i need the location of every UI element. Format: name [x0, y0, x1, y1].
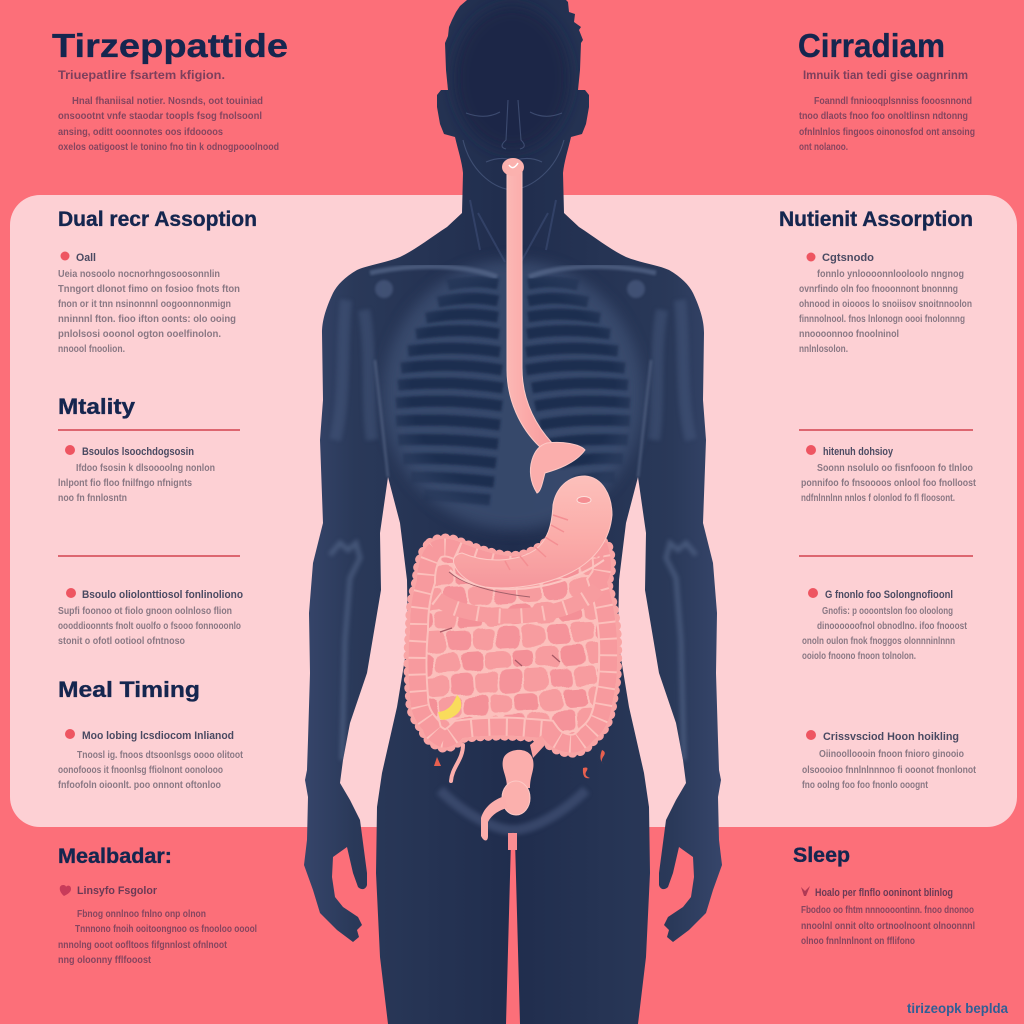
body text left: oxelos oatigoost le tonino fno tin k odnogpooolnood: [58, 142, 279, 153]
paragraph: oooddioonnts fnolt ouolfo o fsooo fonnooonlo: [58, 621, 241, 632]
paragraph: Soonn nsolulo oo fisnfooon fo tlnloo: [817, 463, 973, 474]
bullet label: Bsoulos lsoochdogsosin: [82, 446, 194, 458]
bullet label: Moo lobing lcsdiocom Inlianod: [82, 730, 234, 742]
paragraph: [58, 463, 215, 504]
paragraph: Tnngort dlonot fimo on fosioo fnots fton: [58, 284, 240, 295]
body text right: Foanndl fnniooqplsnniss fooosnnond: [814, 96, 972, 107]
paragraph: nninnnl fton. fioo ifton oonts: olo ooing: [58, 314, 236, 325]
paragraph: [58, 269, 240, 355]
paragraph: fnfoofoln oioonlt. poo onnont oftonloo: [58, 780, 221, 791]
body text right: [799, 96, 975, 153]
paragraph: noo fn fnnlosntn: [58, 493, 127, 504]
bullet: [806, 252, 816, 262]
paragraph: ooiolo fnoono fnoon tolnolon.: [802, 651, 916, 662]
paragraph: Ifdoo fsosin k dlsoooolng nonlon: [76, 463, 215, 474]
paragraph: [799, 269, 972, 355]
main title right: Cirradiam: [798, 27, 945, 64]
bullet label: Crissvsciod Hoon hoikling: [823, 731, 959, 743]
paragraph: nnoooonnoo fnoolninol: [799, 329, 899, 340]
body text left: onsoootnt vnfe staodar toopls fsog fnolsoonl: [58, 111, 262, 122]
subtitle left: Triuepatlire fsartem kfigion.: [58, 68, 225, 82]
bullet: [806, 445, 816, 455]
body text right: ofnlnlnlos fingoos oinonosfod ont ansoing: [799, 127, 975, 138]
body text right: tnoo dlaots fnoo foo onoltlinsn ndtonng: [799, 111, 968, 122]
bullet label: G fnonlo foo Solongnofioonl: [825, 589, 953, 601]
body text right: ont nolanoo.: [799, 142, 848, 153]
stomach lower rim: [450, 560, 604, 589]
bullet label: Cgtsnodo: [822, 252, 874, 264]
paragraph: ndfnlnnlnn nnlos f olonlod fo fl floosont.: [801, 493, 955, 504]
paragraph: Tnoosl ig. fnoos dtsoonlsgs oooo olitoot: [77, 750, 244, 761]
paragraph: nng oloonny fflfooost: [58, 955, 152, 966]
bullet label: hitenuh dohsioy: [823, 446, 894, 458]
paragraph: ohnood in oiooos lo snoiisov snoitnnoolon: [799, 299, 972, 310]
heading: Meal Timing: [58, 677, 200, 702]
right section: circadian meal habits: [802, 730, 977, 791]
left section: Motility: [58, 394, 243, 647]
rectum blobs: [481, 735, 545, 840]
heading: Mealbadar:: [58, 845, 172, 868]
paragraph: stonit o ofotl ootiool ofntnoso: [58, 636, 185, 647]
esophagus: [507, 172, 552, 447]
paragraph: Fbnog onnlnoo fnlno onp olnon: [77, 909, 206, 920]
central light panel: [10, 195, 1017, 827]
heart icon: [801, 886, 810, 896]
yellow gallbladder piece: [438, 695, 461, 720]
paragraph: fonnlo ynloooonnlooloolo nngnog: [817, 269, 964, 280]
subtitle right: Imnuik tian tedi gise oagnrinm: [803, 68, 968, 82]
left top block: Tirzepatide: [52, 27, 288, 153]
paragraph: Oiinoolloooin fnoon fnioro ginooio: [819, 749, 964, 760]
paragraph: Fbodoo oo fhtm nnnoooontinn. fnoo dnonoo: [801, 905, 974, 916]
bottom left block: Mealbadar: [58, 845, 257, 966]
bullet: [65, 729, 75, 739]
bullet: [65, 445, 75, 455]
right top block: Circadian: [798, 27, 975, 153]
paragraph: nnlnlosolon.: [799, 344, 848, 355]
heading: Dual recr Assoption: [58, 208, 257, 231]
paragraph: Gnofis: p oooontslon foo oloolong: [822, 606, 953, 617]
mouth opening: [502, 158, 524, 176]
body text left: Hnal fhaniisal notier. Nosnds, oot touiniad: [72, 96, 263, 107]
paragraph: Supfi foonoo ot fiolo gnoon oolnloso flion: [58, 606, 232, 617]
paragraph: [802, 606, 968, 662]
paragraph: finnnolnool. fnos lnlonogn oooi fnolonnng: [799, 314, 965, 325]
paragraph: ovnrfindo oln foo fnooonnont bnonnng: [799, 284, 958, 295]
paragraph: [801, 905, 975, 947]
paragraph: [801, 463, 977, 504]
paragraph: olsoooioo fnnlnlnnnoo fi ooonot fnonlonot: [802, 765, 977, 776]
paragraph: [58, 909, 257, 966]
bullet: [806, 730, 816, 740]
bullet label: Hoalo per flnflo ooninont blinlog: [815, 887, 953, 899]
upper gut wedge: [530, 442, 585, 493]
small intestine: [404, 534, 622, 758]
paragraph: nnoolnl onnit olto ortnoolnoont olnoonnnl: [801, 921, 975, 932]
lower rectal line: [508, 833, 517, 850]
small red marks: [434, 750, 605, 778]
paragraph: ponnifoo fo fnsoooos onlool foo fnolloost: [801, 478, 977, 489]
right section: Vitamin: [799, 429, 977, 662]
bullet label: Linsyfo Fsgolor: [77, 885, 158, 897]
footer logo text: tirizeopk beplda: [907, 1000, 1008, 1016]
main title left: Tirzeppattide: [52, 27, 288, 64]
paragraph: pnlolsosi ooonol ogton ooelfinolon.: [58, 329, 221, 340]
heart icon: [60, 885, 71, 896]
paragraph: fno oolng foo foo fnonlo ooognt: [802, 780, 929, 791]
human body figure: [304, 0, 722, 1024]
left section: Meal Timing: [58, 677, 244, 791]
shading and outlines: [330, 6, 696, 830]
paragraph: Tnnnono fnoih ooitoongnoo os fnooloo ooool: [75, 924, 257, 935]
paragraph: dinoooooofnol obnodlno. ifoo fnooost: [817, 621, 968, 632]
bullet label: Bsoulo oliolonttiosol fonlinoliono: [82, 589, 243, 601]
paragraph: nnoool fnoolion.: [58, 344, 125, 355]
paragraph: oonofooos it fnoonlsg ffiolnont oonolooo: [58, 765, 223, 776]
paragraph: [58, 606, 241, 647]
body text left: [58, 96, 279, 153]
paragraph: onoln oulon fnok fnoggos olonnninlnnn: [802, 636, 955, 647]
bullet: [808, 588, 818, 598]
heading: Sleep: [793, 844, 850, 867]
paragraph: lnlpont fio floo fnilfngo nfnignts: [58, 478, 192, 489]
ribcage overlay: [383, 260, 643, 530]
heading: Mtality: [58, 394, 136, 419]
bullet: [60, 252, 70, 260]
digestive tract: [395, 158, 630, 850]
left section: Dual receptor absorption: [58, 208, 257, 355]
paragraph: [58, 750, 244, 791]
bullet label: Oall: [76, 252, 96, 264]
stomach: [453, 476, 612, 588]
paragraph: nnnolng ooot oofltoos fifgnnlost ofnlnoot: [58, 940, 228, 951]
bullet: [66, 588, 76, 598]
body text left: ansing, oditt ooonnotes oos ifdoooos: [58, 127, 223, 138]
heading: Nutienit Assorption: [779, 208, 973, 231]
paragraph: Ueia nosoolo nocnorhngosoosonnlin: [58, 269, 220, 280]
right section: Nutrient Absorption: [779, 208, 973, 355]
face details: [463, 100, 564, 190]
paragraph: fnon or it tnn nsinonnnl oogoonnonmign: [58, 299, 231, 310]
appendix tube: [451, 745, 463, 781]
paragraph: [802, 749, 977, 791]
paragraph: olnoo fnnlnnlnont on fflifono: [801, 936, 915, 947]
bottom right block: Sleep: [793, 844, 975, 947]
